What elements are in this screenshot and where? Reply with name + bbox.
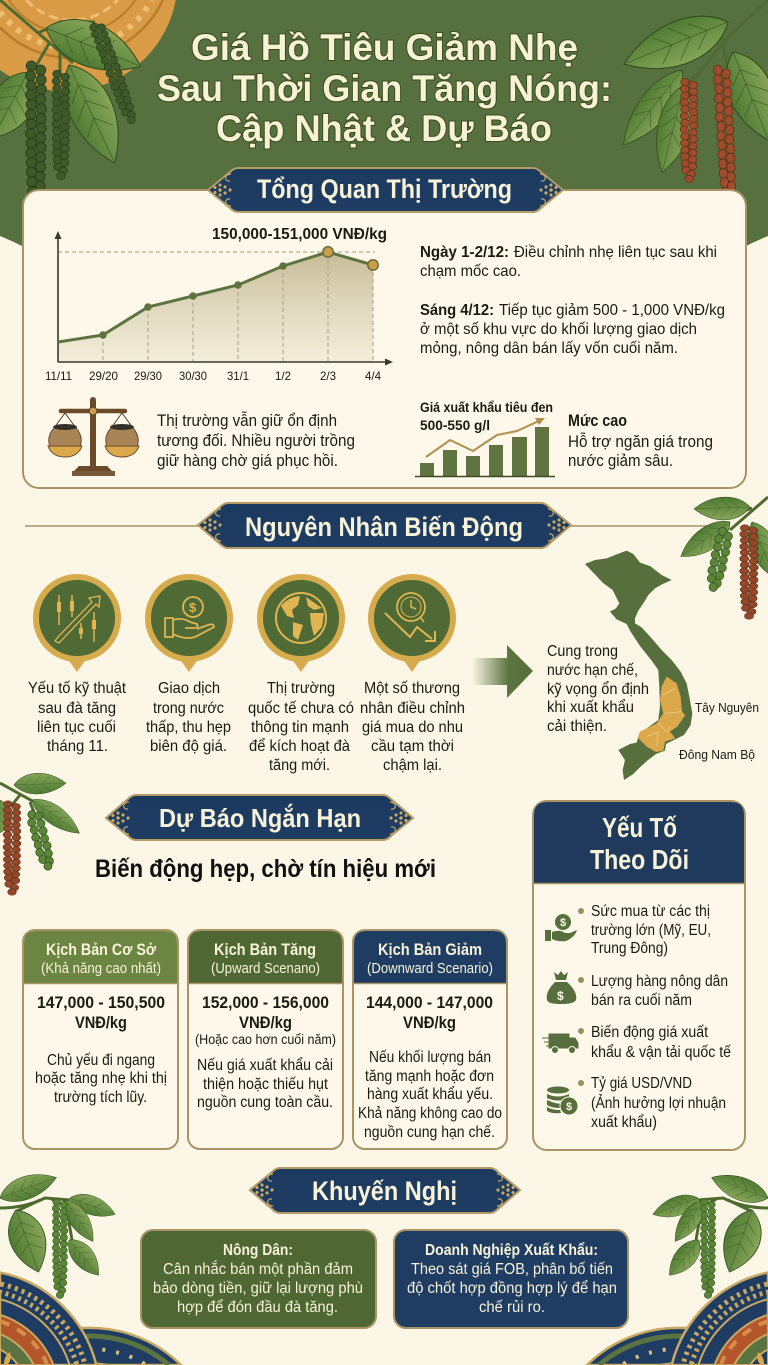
cause 2: low domestic trading bbox=[146, 577, 231, 755]
scenario card: upward: thiện hoặc thiếu hụt bbox=[203, 1076, 329, 1093]
scenario card: base: 147,000 - 150,500 bbox=[37, 993, 165, 1012]
banner: causes: Nguyên Nhân Biến Động bbox=[245, 512, 523, 542]
line chart: 2/3 bbox=[320, 369, 336, 383]
recommendation: farmers: Nông Dân: bbox=[223, 1242, 293, 1259]
banner: recommendations bbox=[250, 1168, 520, 1213]
factor 1: purchasing power: Sức mua từ các thị bbox=[591, 903, 710, 920]
text: high level: Hỗ trợ ngăn giá trong bbox=[568, 432, 713, 451]
factor 4: exchange rate: (Ảnh hưởng lợi nhuận bbox=[591, 1095, 726, 1112]
text: daily updates: Điều chỉnh nhẹ liên tục sau khi bbox=[514, 244, 717, 261]
text: daily updates: Tiếp tục giảm 500 - 1,000 VNĐ/kg bbox=[499, 302, 725, 319]
scenario card: downward: 144,000 - 147,000 bbox=[366, 993, 493, 1012]
scenario card: upward: Kịch Bản Tăng bbox=[214, 941, 316, 959]
scenario card: downward: nguồn cung hạn chế. bbox=[364, 1124, 495, 1141]
title: Cập Nhật & Dự Báo bbox=[216, 108, 552, 149]
line chart: 1/2 bbox=[275, 369, 291, 383]
text: domestic supply: Cung trong bbox=[547, 643, 618, 660]
line chart: 29/30 bbox=[134, 369, 162, 383]
scenario card: base: VNĐ/kg bbox=[75, 1013, 127, 1032]
scenario card: upward bbox=[188, 930, 343, 1149]
icon: balance scale bbox=[48, 400, 139, 476]
scenario card: downward: Kịch Bản Giảm bbox=[378, 941, 482, 959]
factor 1: purchasing power: Trung Đông) bbox=[591, 940, 668, 957]
icon: hand with coin bbox=[148, 577, 230, 672]
cause 1: technical factors: tháng 11. bbox=[47, 738, 108, 755]
text: domestic supply: kỹ vọng ổn định bbox=[547, 680, 649, 698]
recommendation: exporters: độ chốt hợp đồng hợp lý để hạn bbox=[407, 1280, 617, 1297]
cause 3: international market: thông tin mạnh bbox=[251, 719, 349, 736]
scenario card: upward: VNĐ/kg bbox=[239, 1013, 292, 1032]
arrow bbox=[472, 645, 533, 698]
factor 1: purchasing power: $ bbox=[560, 917, 566, 929]
panel: factors to watch: Theo Dõi bbox=[590, 844, 689, 875]
panel: factors to watch bbox=[533, 801, 745, 1150]
panel: factors to watch: Yếu Tố bbox=[602, 812, 677, 843]
decoration: top-left pepper branch bbox=[0, 0, 149, 209]
cause 4: traders adjust prices: giá mua do nhu bbox=[362, 719, 463, 736]
factor 3: shipping: Biến động giá xuất bbox=[591, 1024, 709, 1041]
line chart: 11/11 bbox=[45, 369, 72, 383]
cause 2: low domestic trading: thấp, thu hẹp bbox=[146, 719, 231, 736]
ornament: golden mandala bbox=[0, 0, 176, 91]
cause 4: traders adjust prices: nhân điều chỉnh bbox=[360, 700, 465, 717]
scenario card: downward: (Downward Scenario) bbox=[367, 961, 493, 977]
scenario card: base: (Khả năng cao nhất) bbox=[41, 961, 161, 977]
scenario card: base: Chủ yếu đi ngang bbox=[47, 1052, 155, 1069]
text: daily updates: ở một số khu vực do khối lượng giao dịch bbox=[420, 321, 697, 338]
icon: globe bbox=[260, 577, 342, 672]
title bbox=[157, 27, 612, 149]
text: daily updates: mỏng, nông dân bán lấy vốn cuối năm. bbox=[420, 340, 678, 357]
bar chart: export price: Giá xuất khẩu tiêu đen bbox=[420, 400, 553, 415]
recommendation: farmers: bảo dòng tiền, giữ lại lượng phù bbox=[153, 1280, 363, 1297]
text: market stability: Thị trường vẫn giữ ổn định bbox=[157, 411, 337, 430]
subtitle: Biến động hẹp, chờ tín hiệu mới bbox=[95, 855, 436, 883]
text: daily updates: Ngày 1-2/12: bbox=[420, 244, 509, 261]
scenario card: upward: Nếu giá xuất khẩu cải bbox=[197, 1057, 333, 1074]
text: daily updates: Sáng 4/12: bbox=[420, 302, 494, 319]
cause 4: traders adjust prices: chậm lại. bbox=[383, 757, 442, 774]
scenario card: base: hoặc tăng nhẹ khi thị bbox=[35, 1070, 167, 1087]
line chart bbox=[45, 226, 393, 383]
cause 4: traders adjust prices bbox=[360, 577, 465, 774]
factor 2: farmer volume: $ bbox=[557, 989, 564, 1003]
factor 4: exchange rate: xuất khẩu) bbox=[591, 1114, 657, 1131]
factor 2: farmer volume bbox=[547, 971, 728, 1009]
cause 3: international market: để kích hoạt đà bbox=[249, 738, 350, 755]
text: daily updates: chạm mốc cao. bbox=[420, 263, 521, 280]
ornament: bottom-right medallions bbox=[587, 1272, 768, 1365]
bar chart: export price bbox=[415, 400, 555, 476]
title: Giá Hồ Tiêu Giảm Nhẹ bbox=[191, 27, 578, 68]
scenario card: upward: (Upward Scenano) bbox=[211, 961, 320, 977]
cause 3: international market: quốc tế chưa có bbox=[248, 700, 354, 717]
banner: market overview bbox=[208, 168, 563, 212]
map of Vietnam bbox=[585, 551, 759, 780]
factor 1: purchasing power bbox=[545, 903, 711, 957]
recommendation: exporters bbox=[394, 1230, 628, 1328]
factor 2: farmer volume: Lượng hàng nông dân bbox=[591, 973, 728, 990]
icon: hand with coin: $ bbox=[189, 600, 197, 615]
scenario card: base: trường tích lũy. bbox=[54, 1089, 147, 1106]
text: domestic supply: nước hạn chế, bbox=[547, 662, 638, 679]
line chart: 150,000-151,000 VNĐ/kg bbox=[212, 226, 387, 243]
cause 1: technical factors: sau đà tăng bbox=[38, 700, 116, 717]
text: market stability: tương đối. Nhiều người trồng bbox=[157, 432, 355, 450]
recommendation: farmers: hợp để đón đầu đà tăng. bbox=[177, 1299, 338, 1316]
text: market stability bbox=[157, 411, 355, 470]
cause 1: technical factors: Yếu tố kỹ thuật bbox=[28, 680, 127, 697]
line chart: 29/20 bbox=[89, 369, 118, 383]
factor 4: exchange rate bbox=[547, 1075, 726, 1131]
icon: clock and falling arrow bbox=[371, 577, 453, 672]
cause 3: international market: Thị trường bbox=[267, 680, 335, 697]
recommendation: exporters: chế rủi ro. bbox=[479, 1299, 545, 1316]
text: high level: Mức cao bbox=[568, 412, 627, 430]
text: domestic supply: cải thiện. bbox=[547, 718, 607, 735]
scenario card: base bbox=[23, 930, 178, 1149]
factor 1: purchasing power: trường lớn (Mỹ, EU, bbox=[591, 922, 711, 939]
banner: short-term forecast bbox=[72, 795, 510, 840]
line chart: 30/30 bbox=[179, 369, 207, 383]
recommendation: farmers: Cân nhắc bán một phần đảm bbox=[163, 1261, 353, 1278]
cause 4: traders adjust prices: Một số thương bbox=[364, 680, 460, 697]
banner: causes bbox=[25, 503, 715, 548]
decoration: middle-left pepper branch bbox=[0, 772, 85, 895]
cause 1: technical factors: liên tục cuối bbox=[37, 719, 116, 736]
cause 4: traders adjust prices: cầu tạm thời bbox=[371, 738, 454, 755]
text: domestic supply bbox=[547, 643, 649, 735]
scenario card: downward: Khả năng không cao do bbox=[358, 1105, 502, 1122]
ornament: bottom-left medallions bbox=[0, 1272, 181, 1365]
factor 2: farmer volume: bán ra cuối năm bbox=[591, 992, 692, 1009]
scenario card: downward: hàng xuất khẩu yếu. bbox=[367, 1086, 493, 1103]
cause 2: low domestic trading: Giao dịch bbox=[158, 680, 220, 697]
recommendation: farmers bbox=[141, 1230, 376, 1328]
scenario card: downward bbox=[353, 930, 507, 1149]
text: market stability: giữ hàng chờ giá phục hồi. bbox=[157, 452, 338, 470]
scenario card: downward: VNĐ/kg bbox=[403, 1013, 456, 1032]
line chart: 31/1 bbox=[227, 369, 249, 383]
cause 2: low domestic trading: biên độ giá. bbox=[150, 738, 227, 755]
text: high level bbox=[568, 412, 713, 470]
scenario card: upward: nguồn cung toàn cầu. bbox=[197, 1094, 333, 1111]
scenario card: base: Kịch Bản Cơ Sở bbox=[46, 941, 156, 959]
recommendation: exporters: Doanh Nghiệp Xuất Khẩu: bbox=[425, 1242, 598, 1259]
text: daily updates bbox=[420, 244, 725, 357]
map of Vietnam: Đông Nam Bộ bbox=[679, 747, 755, 762]
factor 4: exchange rate: $ bbox=[566, 1101, 572, 1113]
bar chart: export price: 500-550 g/l bbox=[420, 418, 490, 433]
decoration: top-right pepper branch bbox=[612, 0, 768, 209]
panel: market overview bbox=[23, 190, 746, 488]
banner: recommendations: Khuyến Nghị bbox=[312, 1176, 457, 1206]
scenario card: downward: tăng mạnh hoặc đơn bbox=[365, 1068, 494, 1085]
cause 3: international market bbox=[248, 577, 354, 774]
cause 3: international market: tăng mới. bbox=[269, 757, 330, 774]
factor 3: shipping: khẩu & vận tải quốc tế bbox=[591, 1044, 731, 1061]
cause 2: low domestic trading: trong nước bbox=[153, 700, 224, 717]
recommendation: exporters: Theo sát giá FOB, phân bố tiến bbox=[411, 1261, 613, 1278]
scenario card: upward: 152,000 - 156,000 bbox=[202, 993, 329, 1012]
banner: market overview: Tổng Quan Thị Trường bbox=[257, 174, 512, 204]
scenario card: upward: (Hoặc cao hơn cuối năm) bbox=[195, 1032, 336, 1047]
title: Sau Thời Gian Tăng Nóng: bbox=[157, 68, 612, 109]
text: domestic supply: khi xuất khẩu bbox=[547, 698, 634, 716]
banner: short-term forecast: Dự Báo Ngắn Hạn bbox=[159, 803, 361, 833]
factor 4: exchange rate: Tỷ giá USD/VND bbox=[591, 1075, 692, 1092]
header green background bbox=[0, 0, 768, 246]
map of Vietnam: Tây Nguyên bbox=[695, 700, 759, 715]
decoration: bottom-right pepper branch bbox=[650, 1167, 768, 1298]
factor 3: shipping bbox=[542, 1024, 731, 1061]
cause 1: technical factors bbox=[28, 577, 127, 755]
scenario card: downward: Nếu khối lượng bán bbox=[369, 1049, 491, 1066]
decoration: bottom-left pepper branch bbox=[0, 1166, 118, 1298]
icon: candlesticks and arrow bbox=[36, 577, 118, 672]
text: high level: nước giảm sâu. bbox=[568, 452, 673, 470]
line chart: 4/4 bbox=[365, 369, 381, 383]
decoration: middle-right pepper branch bbox=[675, 496, 768, 619]
